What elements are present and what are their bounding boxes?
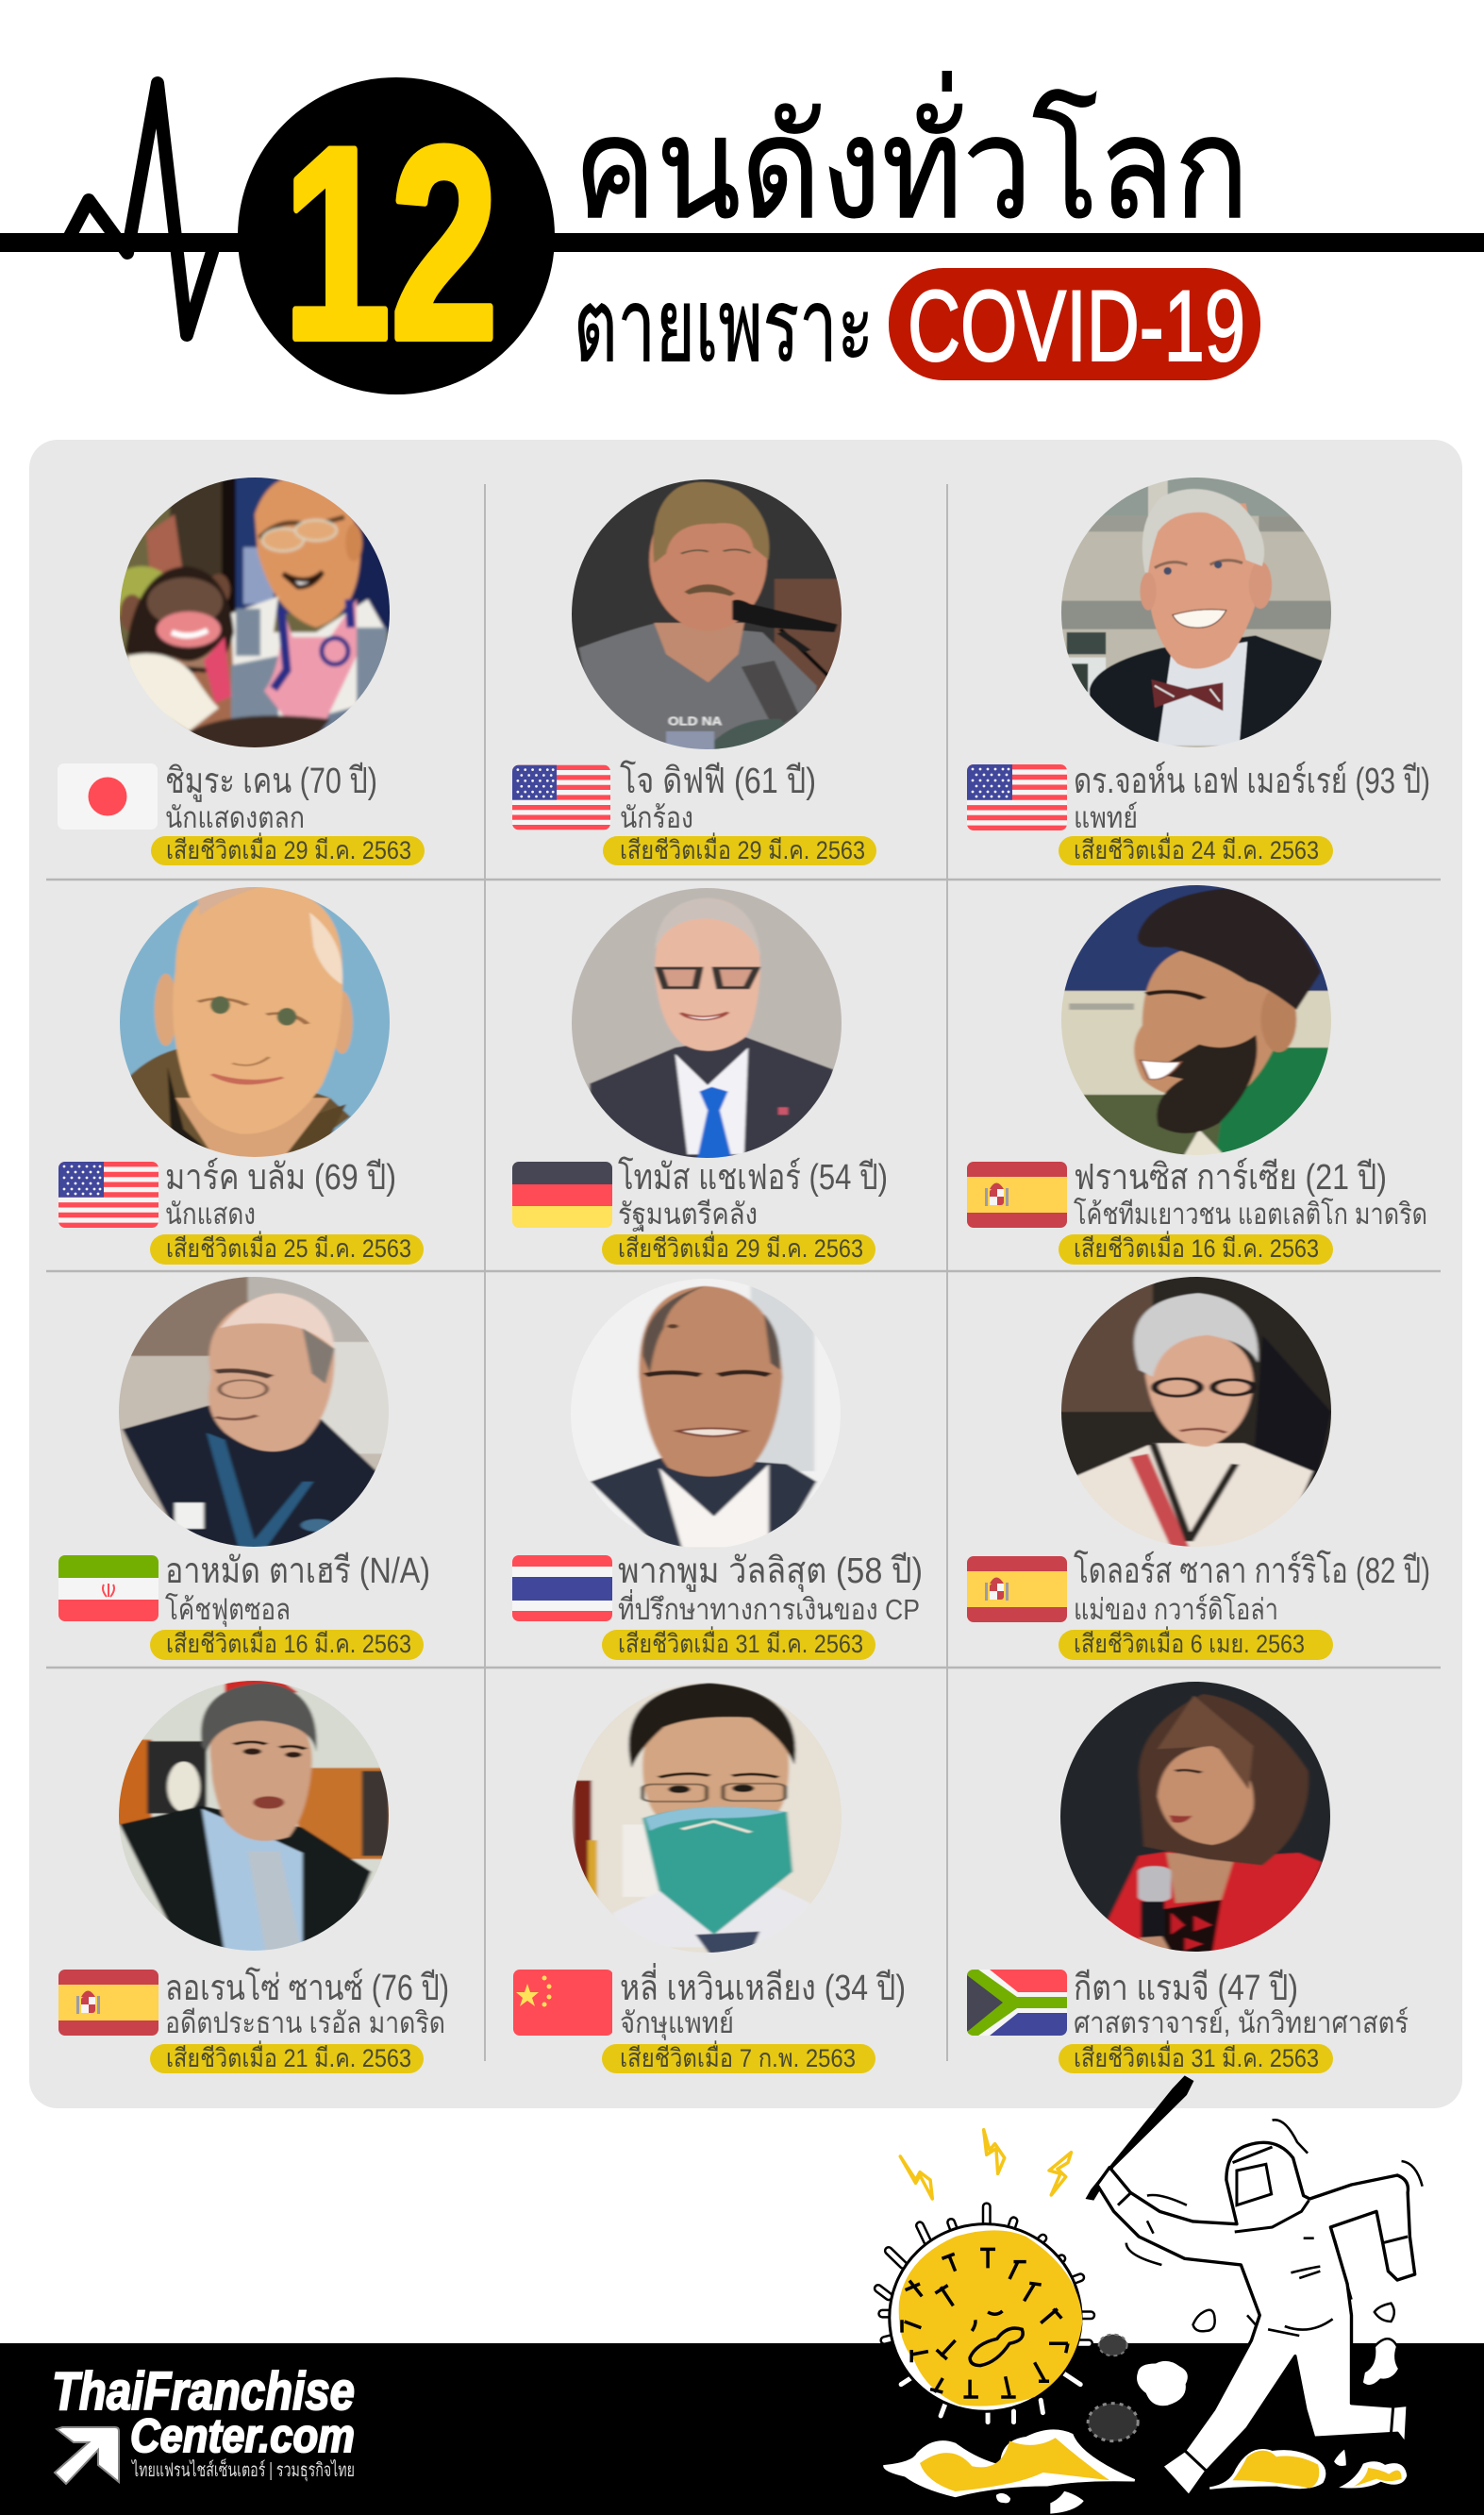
card: Ahmad Taheri [58,1272,430,1660]
date pill: เสียชีวิตเมื่อ 31 มี.ค. 2563 [618,1626,863,1658]
photo: Ahmad Taheri [119,1277,389,1547]
card: Geeta Ramjee [967,1677,1409,2073]
date pill: เสียชีวิตเมื่อ 25 มี.ค. 2563 [166,1231,411,1263]
card: Mark Blum [58,882,424,1265]
flag: China [513,1970,612,2036]
card: John F. Murray [967,475,1430,865]
flag: Spain [967,1556,1067,1622]
flag: South Africa [967,1970,1068,2036]
role: นักแสดง [165,1198,256,1231]
name: ชิมูระ เคน (70 ปี) [165,762,377,802]
photo: Francisco Garcia [1053,884,1337,1158]
name: โทมัส แชเฟอร์ (54 ปี) [618,1156,888,1198]
card: Dolores Sala Carrio [967,1272,1430,1660]
date pill: เสียชีวิตเมื่อ 29 มี.ค. 2563 [618,1231,863,1263]
logo: ThaiFranchiseCenter: ThaiFranchise [52,2361,355,2422]
photo: Joe Diffie singing: OLD NA [668,715,722,729]
name: โจ ดิฟฟี (61 ปี) [620,760,816,801]
flag: Spain [967,1162,1067,1228]
title line 1: คนดังทั่วโลก [574,72,1249,247]
flag: Iran [58,1555,159,1622]
card: Thomas Schaefer [512,884,888,1265]
role: อดีตประธาน เรอัล มาดริด [165,2006,445,2039]
footer band [0,2343,1484,2515]
photo: Dolores Sala Carrio [1061,1277,1331,1547]
header: heartbeat line [0,83,1484,335]
date pill: เสียชีวิตเมื่อ 6 เมย. 2563 [1074,1626,1305,1658]
photo: Shimura Ken with chimpanzee [120,478,390,747]
date pill: เสียชีวิตเมื่อ 31 มี.ค. 2563 [1074,2040,1319,2072]
photo: Mark Blum [110,882,395,1163]
card: Lorenzo Sanz [58,1677,449,2073]
panel: people grid [29,440,1462,2108]
photo: Thomas Schaefer [565,884,850,1163]
photo: Phakphum Wanlisut [568,1276,851,1551]
date pill: เสียชีวิตเมื่อ 16 มี.ค. 2563 [166,1626,411,1658]
flag: Japan [58,763,158,830]
role: จักษุแพทย์ [620,2006,734,2041]
logo: ThaiFranchiseCenter [52,2361,355,2484]
photo: Geeta Ramjee [1060,1682,1330,1952]
role: โค้ชฟุตซอล [165,1593,291,1628]
flag: USA [967,764,1067,830]
name: ฟรานซิส การ์เซีย (21 ปี) [1074,1157,1387,1198]
date pill: เสียชีวิตเมื่อ 7 ก.พ. 2563 [620,2040,856,2072]
card: Li Wenliang [513,1680,906,2073]
logo: ThaiFranchiseCenter: Center.com [130,2409,355,2462]
role: รัฐมนตรีคลัง [618,1198,758,1232]
card: Joe Diffie [512,472,876,865]
photo: Lorenzo Sanz [119,1681,389,1951]
date pill: เสียชีวิตเมื่อ 29 มี.ค. 2563 [620,832,865,864]
role: แพทย์ [1074,801,1138,834]
date pill: เสียชีวิตเมื่อ 16 มี.ค. 2563 [1074,1231,1319,1263]
role: นักแสดงตลก [165,801,305,834]
flag: USA [512,765,610,830]
flag: Spain [58,1970,158,2036]
role: ศาสตราจารย์, นักวิทยาศาสตร์ [1074,2006,1409,2039]
photo: Li Wenliang in mask [568,1680,851,1956]
name: พากพูม วัลลิสุต (58 ปี) [618,1551,923,1592]
card: Francisco Garcia [967,884,1427,1265]
icon: coronavirus [878,2206,1091,2423]
role: นักร้อง [620,801,693,834]
role: แม่ของ กวาร์ดิโอล่า [1074,1593,1278,1626]
name: ลอเรนโซ่ ซานซ์ (76 ปี) [165,1967,449,2008]
badge: number 12: 12 [283,91,498,396]
covid-19 pill: COVID-19 [908,269,1245,382]
card: Phakphum Wanlisut [512,1276,923,1660]
flag: USA [58,1162,158,1228]
date pill: เสียชีวิตเมื่อ 29 มี.ค. 2563 [166,832,411,864]
title line 2: ตายเพราะ [574,268,874,382]
illustration: doctor hitting coronavirus [878,2075,1423,2515]
icon: figure in protective suit [1097,2120,1423,2496]
icon: baseball bat [1086,2075,1193,2201]
name: หลี่ เหวินเหลียง (34 ปี) [620,1963,906,2008]
logo: ThaiFranchiseCenter: ไทยแฟรนไชส์เซ็นเตอร์ | รวมธุรกิจไทย [131,2457,355,2482]
role: ที่ปรึกษาทางการเงินของ CP [618,1589,920,1626]
photo: Joe Diffie singing [572,479,842,749]
date pill: เสียชีวิตเมื่อ 24 มี.ค. 2563 [1074,832,1319,864]
icon: lightning bolts [900,2130,1071,2199]
name: กีตา แรมจี (47 ปี) [1074,1969,1298,2008]
icon: yellow smoke clouds [884,2431,1406,2496]
icon: white clouds [995,2304,1399,2515]
icon: small dark virus particles [1088,2335,1138,2441]
name: อาหมัด ตาเฮรี (N/A) [165,1551,430,1591]
flag: Thailand [512,1555,613,1623]
photo: Dr John Murray [1057,475,1337,752]
name: มาร์ค บลัม (69 ปี) [165,1157,396,1198]
date pill: เสียชีวิตเมื่อ 21 มี.ค. 2563 [166,2040,411,2072]
flag: Germany [512,1162,612,1228]
card: Shimura Ken [58,472,425,865]
